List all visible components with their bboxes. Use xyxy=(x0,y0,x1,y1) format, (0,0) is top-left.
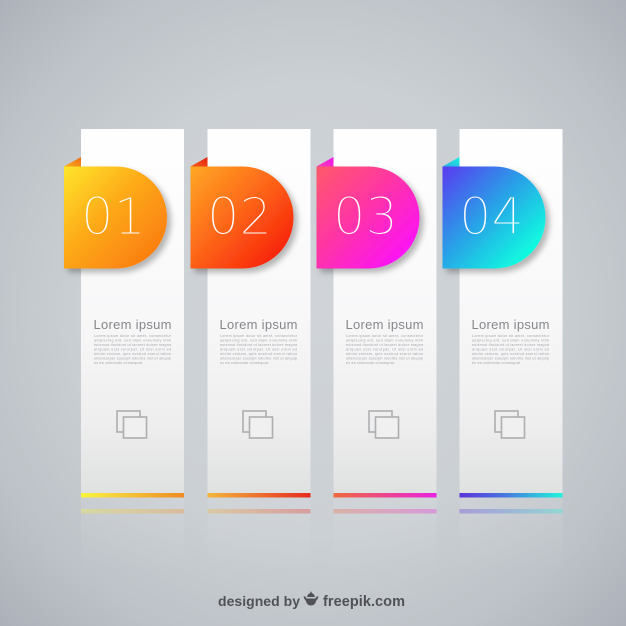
card 3 icon xyxy=(369,411,398,438)
card 3 body text xyxy=(346,334,424,365)
card 2 badge xyxy=(190,166,294,268)
card 1 panel xyxy=(81,129,184,497)
card 4 fold xyxy=(442,157,460,166)
card 1 body text: aliquam erat volutpat. Ut wisi enim ad xyxy=(94,348,171,352)
card 4 number: 04 xyxy=(459,188,524,247)
card 1 number: 01 xyxy=(81,188,146,247)
card 2 body text xyxy=(220,334,298,365)
card 3 heading: Lorem ipsum xyxy=(346,317,424,332)
card 4 body text: euismod tincidunt ut laoreet dolore magna xyxy=(472,343,549,347)
card 3 body text: euismod tincidunt ut laoreet dolore magna xyxy=(346,343,423,347)
card 1 bar reflection xyxy=(81,509,184,514)
card 4 body text: aliquam erat volutpat. Ut wisi enim ad xyxy=(472,348,549,352)
card 1 icon xyxy=(117,411,146,438)
card 2 body text: ex ea commodo consequat. xyxy=(220,361,269,365)
card 2 reflection xyxy=(208,497,310,572)
card 1 heading: Lorem ipsum xyxy=(94,317,172,332)
card 3 body text: ullamcorper suscipit lobortis nisl ut aliquip xyxy=(346,356,423,360)
card 4 body text: ex ea commodo consequat. xyxy=(472,361,521,365)
card 2 fold xyxy=(190,157,208,166)
card 2 accent bar xyxy=(208,493,310,498)
card 4 panel xyxy=(460,129,562,497)
footer credit xyxy=(218,591,405,610)
card 1 body text xyxy=(94,334,172,365)
card 1 body text: ex ea commodo consequat. xyxy=(94,361,143,365)
card 2 body text: ullamcorper suscipit lobortis nisl ut aliquip xyxy=(220,356,297,360)
credit text left: designed by xyxy=(218,593,300,609)
card 1 body text: euismod tincidunt ut laoreet dolore magna xyxy=(94,343,171,347)
card 4 reflection xyxy=(460,497,562,572)
card 3 body text: minim veniam, quis nostrud exerci tation xyxy=(346,352,423,356)
card 3 panel xyxy=(334,129,436,497)
card 3 number: 03 xyxy=(333,188,398,247)
card 4 body text: adipiscing elit, sed diam nonummy nibh xyxy=(472,338,549,342)
card 2 body text: minim veniam, quis nostrud exerci tation xyxy=(220,352,297,356)
card 1 accent bar xyxy=(81,493,184,498)
card 2 number: 02 xyxy=(207,188,272,247)
card 3 fold xyxy=(316,157,334,166)
card 3 bar reflection xyxy=(334,509,436,514)
card 4 bar reflection xyxy=(460,509,562,514)
card 1 body text: adipiscing elit, sed diam nonummy nibh xyxy=(94,338,171,342)
card 4 body text xyxy=(472,334,550,365)
card 2 body text: Lorem ipsum dolor sit amet, consectetur xyxy=(220,334,298,338)
card 3 xyxy=(316,129,436,572)
card 1 body text: ullamcorper suscipit lobortis nisl ut aliquip xyxy=(94,356,171,360)
card 2 heading: Lorem ipsum xyxy=(220,317,298,332)
card 2 body text: aliquam erat volutpat. Ut wisi enim ad xyxy=(220,348,297,352)
card 3 body text: ex ea commodo consequat. xyxy=(346,361,395,365)
card 4 body text: Lorem ipsum dolor sit amet, consectetur xyxy=(472,334,550,338)
card 2 body text: adipiscing elit, sed diam nonummy nibh xyxy=(220,338,297,342)
card 2 panel xyxy=(208,129,310,497)
card 1 fold xyxy=(64,157,81,166)
card 4 body text: ullamcorper suscipit lobortis nisl ut aliquip xyxy=(472,356,549,360)
card 1 badge xyxy=(64,166,167,268)
card 1 body text: Lorem ipsum dolor sit amet, consectetur xyxy=(94,334,172,338)
card 4 icon xyxy=(495,411,524,438)
icon: freepik mascot xyxy=(304,591,318,606)
card 4 accent bar xyxy=(460,493,562,498)
card 2 icon xyxy=(243,411,272,438)
card 2 body text: euismod tincidunt ut laoreet dolore magna xyxy=(220,343,297,347)
card 4 xyxy=(442,129,562,572)
card 1 xyxy=(64,129,184,572)
card 4 badge xyxy=(442,166,546,268)
card 3 reflection xyxy=(334,497,436,572)
card 3 accent bar xyxy=(334,493,436,498)
card 1 reflection xyxy=(81,497,184,572)
card 3 body text: adipiscing elit, sed diam nonummy nibh xyxy=(346,338,423,342)
credit text right: freepik.com xyxy=(323,594,405,610)
card 3 body text: aliquam erat volutpat. Ut wisi enim ad xyxy=(346,348,423,352)
card 2 bar reflection xyxy=(208,509,310,514)
card 4 body text: minim veniam, quis nostrud exerci tation xyxy=(472,352,549,356)
card 2 xyxy=(190,129,310,572)
card 4 heading: Lorem ipsum xyxy=(472,317,550,332)
card 3 body text: Lorem ipsum dolor sit amet, consectetur xyxy=(346,334,424,338)
card 1 body text: minim veniam, quis nostrud exerci tation xyxy=(94,352,171,356)
card 3 badge xyxy=(316,166,420,268)
